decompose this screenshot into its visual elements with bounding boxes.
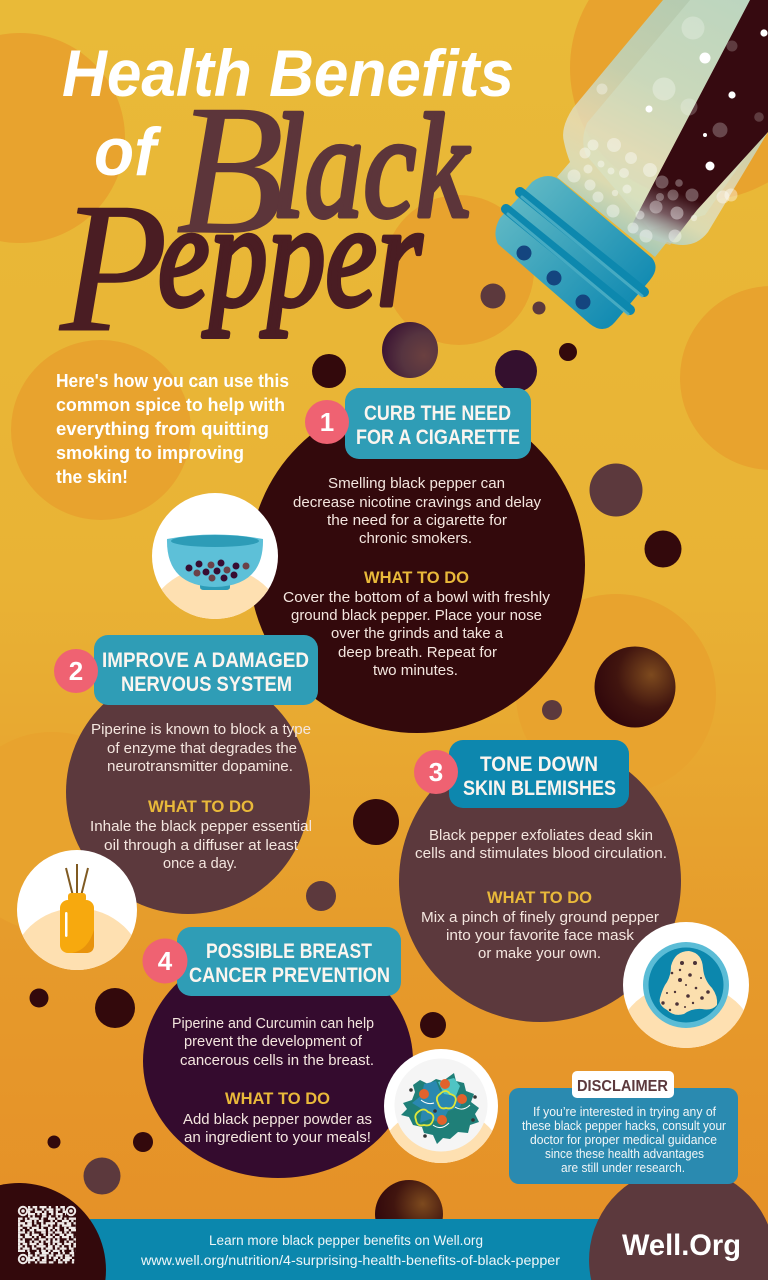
- panel 1 what to do text: over the grinds and take a: [331, 626, 504, 642]
- number 4 badge: [142, 938, 188, 984]
- pepper dots: [30, 284, 682, 1248]
- number 2 badge: [54, 649, 98, 693]
- title: Health Benefits: [62, 36, 514, 110]
- panel 4 description: [172, 1016, 374, 1069]
- shaker rim: [506, 192, 644, 314]
- number 4 badge: 4: [158, 946, 173, 976]
- panel 4 header: [177, 927, 401, 996]
- panel 3 what to do heading: WHAT TO DO: [487, 888, 592, 907]
- panel 1 header: [345, 388, 531, 459]
- title: [59, 36, 514, 371]
- footer text: www.well.org/nutrition/4-surprising-health-benefits-of-black-pepper: [140, 1253, 561, 1268]
- panel 3 what to do text: or make your own.: [478, 946, 601, 962]
- panel 1 heading: [356, 402, 520, 449]
- panel 2 heading: [102, 649, 309, 696]
- intro text: everything from quitting: [56, 419, 269, 439]
- bottom right circle: [589, 1167, 768, 1280]
- panel 3 heading: [463, 753, 616, 800]
- panel 2 what to do text: once a day.: [163, 856, 237, 872]
- title: B: [176, 67, 284, 273]
- panel 4 description: cancerous cells in the breast.: [180, 1053, 374, 1069]
- number 1 badge: 1: [320, 407, 334, 437]
- panel: benefit 1: [249, 388, 585, 733]
- panel 2 what to do text: Inhale the black pepper essential: [90, 819, 312, 835]
- shaker pepper fill: [628, 0, 768, 245]
- disclaimer label: [572, 1071, 674, 1098]
- panel 3 what to do text: into your favorite face mask: [446, 928, 635, 944]
- panel 2 heading: NERVOUS SYSTEM: [121, 673, 292, 696]
- panel 1 what to do text: deep breath. Repeat for: [338, 645, 497, 661]
- panel 2 description: neurotransmitter dopamine.: [107, 759, 293, 775]
- panel: benefit 3: [399, 740, 681, 1022]
- footer text: Learn more black pepper benefits on Well.org: [209, 1233, 483, 1248]
- panel 1 what to do text: [283, 590, 551, 679]
- logo: Well.Org: [622, 1229, 741, 1262]
- disclaimer text: these black pepper hacks, consult your: [522, 1119, 726, 1133]
- shaker cap: [495, 176, 656, 329]
- title: of: [94, 114, 162, 190]
- icon: reed diffuser: [17, 850, 137, 970]
- panel 3 description: [415, 828, 667, 862]
- disclaimer text: If you’re interested in trying any of: [533, 1105, 717, 1119]
- panel 2 circle: [66, 670, 310, 914]
- disclaimer text: are still under research.: [561, 1161, 685, 1175]
- panel 1 description: Smelling black pepper can: [328, 476, 505, 492]
- panel: benefit 4: [142, 927, 413, 1178]
- panel 4 what to do text: [183, 1112, 372, 1146]
- panel 1 circle: [249, 397, 585, 733]
- panel 1 what to do text: two minutes.: [373, 663, 458, 679]
- intro text: [56, 371, 289, 487]
- disclaimer label: DISCLAIMER: [577, 1078, 668, 1095]
- panel 2 what to do text: [90, 819, 312, 872]
- icon: salad plate: [384, 1049, 498, 1163]
- panel 3 what to do text: [421, 910, 659, 962]
- panel 4 description: prevent the development of: [184, 1034, 363, 1050]
- title: P: [59, 165, 168, 371]
- panel 1 heading: FOR A CIGARETTE: [356, 426, 520, 449]
- panel 4 heading: POSSIBLE BREAST: [206, 940, 372, 963]
- shaker holes: [516, 246, 590, 310]
- title: epper: [158, 174, 423, 338]
- footer text: [140, 1233, 561, 1268]
- number 3 badge: [414, 750, 458, 794]
- panel 4 what to do text: Add black pepper powder as: [183, 1112, 372, 1128]
- panel 1 description: the need for a cigarette for: [327, 513, 507, 529]
- panel 4 description: Piperine and Curcumin can help: [172, 1016, 374, 1032]
- panel 1 description: [293, 476, 542, 547]
- disclaimer text: doctor for proper medical guidance: [530, 1133, 717, 1147]
- shaker inner glass: [583, 0, 768, 230]
- panel 3 what to do text: Mix a pinch of finely ground pepper: [421, 910, 659, 926]
- panel 2 what to do heading: WHAT TO DO: [148, 797, 254, 816]
- disclaimer box: [509, 1071, 738, 1184]
- bottom left circle with QR: [0, 1183, 106, 1280]
- disclaimer text: since these health advantages: [545, 1147, 704, 1161]
- panel 4 what to do heading: WHAT TO DO: [225, 1089, 330, 1108]
- panel 4 what to do text: an ingredient to your meals!: [184, 1130, 371, 1146]
- panel 3 heading: SKIN BLEMISHES: [463, 777, 616, 800]
- shaker bubbles: [568, 16, 768, 242]
- panel 1 what to do text: Cover the bottom of a bowl with freshly: [283, 590, 551, 606]
- panel: benefit 2: [54, 635, 318, 914]
- panel 3 description: cells and stimulates blood circulation.: [415, 846, 667, 862]
- panel 1 heading: CURB THE NEED: [364, 402, 511, 425]
- panel 2 description: [91, 722, 311, 775]
- intro text: smoking to improving: [56, 443, 244, 463]
- panel 2 description: of enzyme that degrades the: [107, 741, 297, 757]
- panel 2 description: Piperine is known to block a type: [91, 722, 311, 738]
- panel 4 shape: [143, 944, 413, 1178]
- panel 2 heading: IMPROVE A DAMAGED: [102, 649, 309, 672]
- icon: bowl of pepper: [152, 493, 278, 619]
- shaker glass: [557, 0, 768, 257]
- intro text: common spice to help with: [56, 395, 285, 415]
- panel 3 circle: [399, 740, 681, 1022]
- number 1 badge: [305, 400, 349, 444]
- intro text: the skin!: [56, 467, 128, 487]
- panel 3 description: Black pepper exfoliates dead skin: [429, 828, 653, 844]
- number 2 badge: 2: [69, 656, 83, 686]
- panel 1 what to do heading: WHAT TO DO: [364, 568, 469, 587]
- panel 2 header: [94, 635, 318, 705]
- title: lack: [272, 85, 470, 249]
- panel 1 what to do text: ground black pepper. Place your nose: [291, 608, 542, 624]
- QR code: [18, 1207, 76, 1263]
- bottom band: [90, 1219, 610, 1280]
- icon: face mask: [623, 922, 749, 1048]
- panel 2 what to do text: oil through a diffuser at least: [104, 838, 298, 854]
- panel 3 header: [449, 740, 629, 808]
- disclaimer text: [522, 1105, 726, 1175]
- panel 1 description: chronic smokers.: [359, 531, 472, 547]
- background blobs: [0, 0, 768, 932]
- panel 4 heading: [189, 940, 390, 987]
- icon: pepper shaker: [495, 0, 768, 329]
- panel 3 heading: TONE DOWN: [480, 753, 598, 776]
- number 3 badge: 3: [429, 757, 443, 787]
- panel 4 heading: CANCER PREVENTION: [189, 964, 390, 987]
- intro text: Here's how you can use this: [56, 371, 289, 391]
- panel 1 description: decrease nicotine cravings and delay: [293, 495, 542, 511]
